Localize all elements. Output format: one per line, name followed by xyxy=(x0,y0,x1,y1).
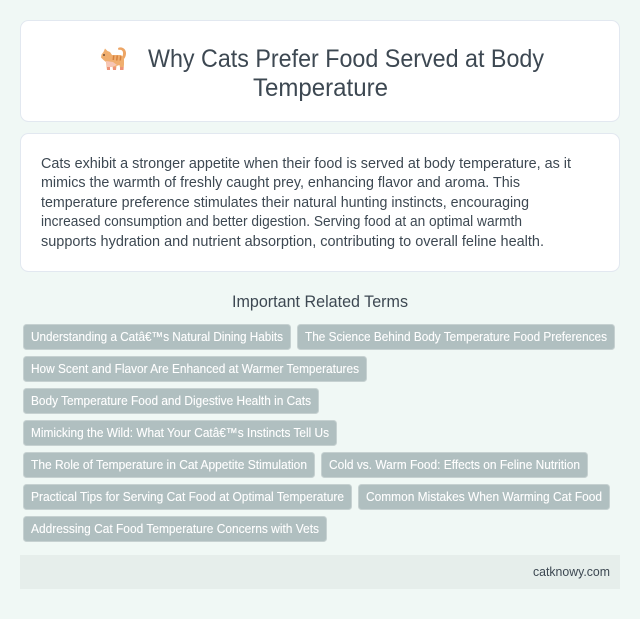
description text xyxy=(41,156,571,250)
icon: orange cat xyxy=(101,47,126,70)
tag: scent and flavor xyxy=(24,356,366,382)
description text: increased consumption and better digestion. Serving food at an optimal warmth xyxy=(41,214,522,230)
panel: title card xyxy=(20,20,620,122)
tag: appetite stimulation: The Role of Temperature in Cat Appetite Stimulation xyxy=(31,457,307,472)
tag: science behind preferences xyxy=(298,324,614,350)
tag: cold vs warm xyxy=(322,452,588,478)
footer source text: catknowy.com xyxy=(533,564,610,579)
tag: common mistakes: Common Mistakes When Warming Cat Food xyxy=(366,489,602,504)
description text: supports hydration and nutrient absorption, contributing to overall feline health. xyxy=(41,234,544,250)
tag: natural dining habits xyxy=(24,324,290,350)
heading: important related terms: Important Related Terms xyxy=(232,293,408,311)
description text: Cats exhibit a stronger appetite when their food is served at body temperature, as it xyxy=(41,156,571,172)
title text: Temperature xyxy=(253,74,388,102)
tag: appetite stimulation xyxy=(24,452,314,478)
tag: mimicking the wild xyxy=(24,420,336,446)
panel: description card xyxy=(20,134,620,272)
tag: science behind preferences: The Science Behind Body Temperature Food Preferences xyxy=(305,329,607,344)
description text: temperature preference stimulates their natural hunting instincts, encouraging xyxy=(41,195,529,211)
panel: related term tags xyxy=(24,324,614,542)
tag: practical tips xyxy=(24,484,352,510)
tag: common mistakes xyxy=(358,484,610,510)
tag: practical tips: Practical Tips for Serving Cat Food at Optimal Temperature xyxy=(31,489,344,504)
description text: mimics the warmth of freshly caught prey, enhancing flavor and aroma. This xyxy=(41,175,520,191)
title text xyxy=(148,45,544,102)
tag: vets: Addressing Cat Food Temperature Concerns with Vets xyxy=(31,521,319,536)
tag: digestive health: Body Temperature Food and Digestive Health in Cats xyxy=(31,393,311,408)
tag: vets xyxy=(24,516,326,542)
tag: scent and flavor: How Scent and Flavor Are Enhanced at Warmer Temperatures xyxy=(31,361,359,376)
tag: digestive health xyxy=(24,388,318,414)
tag: mimicking the wild: Mimicking the Wild: What Your Catâ€™s Instincts Tell Us xyxy=(31,425,329,440)
title text: Why Cats Prefer Food Served at Body xyxy=(148,45,544,73)
tag: cold vs warm: Cold vs. Warm Food: Effects on Feline Nutrition xyxy=(329,457,580,472)
footer bar xyxy=(20,555,620,589)
tag: natural dining habits: Understanding a Catâ€™s Natural Dining Habits xyxy=(31,329,283,344)
